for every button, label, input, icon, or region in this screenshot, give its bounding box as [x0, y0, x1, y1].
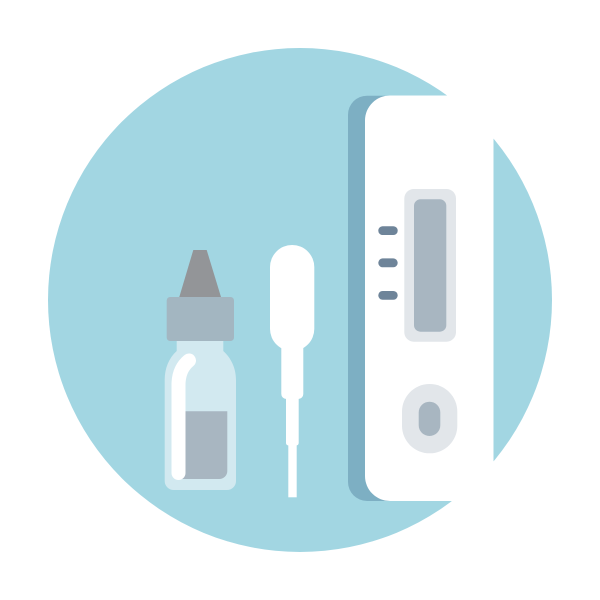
pipette middle stem	[286, 390, 299, 446]
pipette upper stem	[281, 335, 303, 399]
pipette tip	[288, 440, 297, 497]
icon: swab pipette	[270, 245, 314, 497]
background circle	[48, 48, 552, 552]
sample well	[402, 384, 457, 453]
cassette shadow side	[348, 96, 408, 501]
bottle glass body	[165, 338, 236, 490]
icon: dropper bottle	[165, 250, 236, 490]
cassette white body	[365, 95, 494, 501]
result window	[404, 189, 456, 342]
pipette bulb	[270, 245, 314, 351]
bottle liquid	[178, 411, 227, 479]
tick marks	[378, 226, 398, 300]
bottle nozzle	[179, 250, 221, 297]
bottle highlight	[178, 360, 189, 473]
icon: test cassette	[348, 95, 494, 501]
bottle cap	[167, 297, 234, 341]
